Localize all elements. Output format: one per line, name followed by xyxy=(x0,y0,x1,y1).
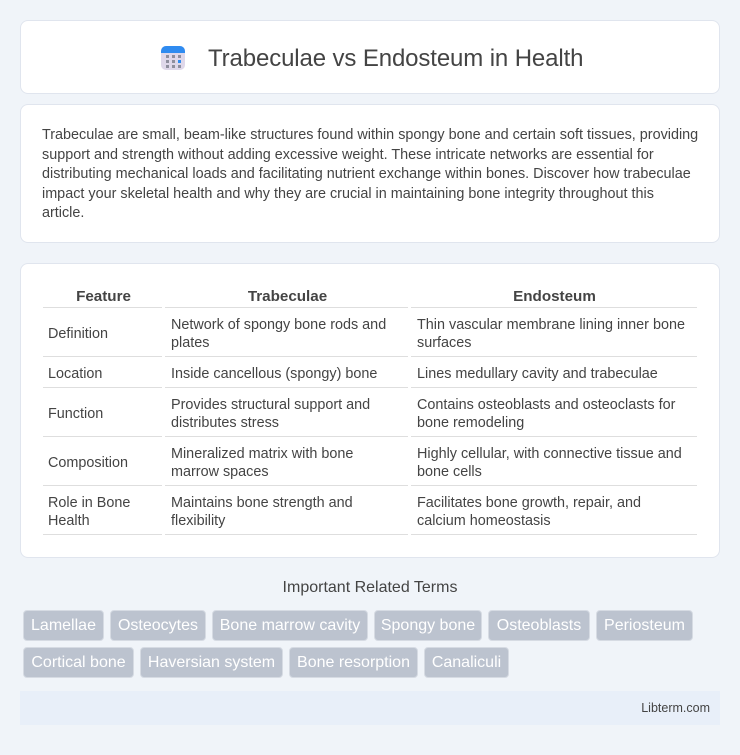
title: Trabeculae vs Endosteum in Health xyxy=(208,45,583,72)
intro text: support and strength without adding excessive weight. These intricate networks are essential for xyxy=(42,146,654,162)
row: function: distributes stress xyxy=(171,415,279,431)
row: role in bone health xyxy=(48,495,641,529)
footer credit: Libterm.com xyxy=(641,701,710,715)
row: definition: Definition xyxy=(48,326,108,342)
related terms tags: Periosteum xyxy=(604,617,685,634)
row: role in bone health: flexibility xyxy=(171,513,225,529)
row: definition: Thin vascular membrane lining inner bone xyxy=(417,317,685,333)
related terms heading: Important Related Terms xyxy=(283,579,457,596)
icon: calendar xyxy=(161,46,185,70)
row: definition: plates xyxy=(171,335,209,351)
row: function: Provides structural support and xyxy=(171,397,370,413)
row: location: Location xyxy=(48,366,102,382)
row: composition: marrow spaces xyxy=(171,464,269,480)
row: function: bone remodeling xyxy=(417,415,524,431)
header card xyxy=(20,20,720,94)
intro text: article. xyxy=(42,205,84,221)
comparison table card xyxy=(20,263,720,558)
row: function xyxy=(48,397,676,431)
row: composition xyxy=(48,446,682,480)
row: definition xyxy=(48,317,685,351)
intro text: distributing mechanical loads and facilitating nutrient exchange within bones. Discover how trabeculae xyxy=(42,166,691,182)
related terms tags xyxy=(23,610,693,678)
intro card xyxy=(20,104,720,243)
related terms tags: Osteocytes xyxy=(118,617,198,634)
related terms tags: Cortical bone xyxy=(31,654,126,671)
row: composition: Composition xyxy=(48,455,128,471)
row: composition: Highly cellular, with connective tissue and xyxy=(417,446,682,462)
row: role in bone health: calcium homeostasis xyxy=(417,513,551,529)
row: role in bone health: Health xyxy=(48,513,90,529)
row: composition: bone cells xyxy=(417,464,482,480)
row: function: Function xyxy=(48,406,103,422)
footer bar xyxy=(20,691,720,725)
row: location: Inside cancellous (spongy) bone xyxy=(171,366,377,382)
table header xyxy=(76,288,596,305)
related terms tags: Haversian system xyxy=(148,654,275,671)
row: role in bone health: Role in Bone xyxy=(48,495,130,511)
intro text: Trabeculae are small, beam-like structures found within spongy bone and certain soft tissues, providing xyxy=(42,127,698,143)
related terms tags: Spongy bone xyxy=(381,617,475,634)
row: role in bone health: Facilitates bone growth, repair, and xyxy=(417,495,641,511)
related terms tags: Osteoblasts xyxy=(497,617,581,634)
row: location xyxy=(48,366,658,382)
related terms tags: Lamellae xyxy=(31,617,96,634)
row: role in bone health: Maintains bone strength and xyxy=(171,495,353,511)
intro text xyxy=(42,127,698,221)
row: function: Contains osteoblasts and osteoclasts for xyxy=(417,397,675,413)
intro text: impact your skeletal health and why they are crucial in maintaining bone integrity throughout this xyxy=(42,186,654,202)
table header: Trabeculae xyxy=(248,288,327,305)
table header: Feature xyxy=(76,288,131,305)
row: composition: Mineralized matrix with bone xyxy=(171,446,353,462)
related terms tags: Canaliculi xyxy=(432,654,501,671)
table header: Endosteum xyxy=(513,288,596,305)
row: location: Lines medullary cavity and trabeculae xyxy=(417,366,658,382)
row: definition: Network of spongy bone rods and xyxy=(171,317,386,333)
related terms tags: Bone marrow cavity xyxy=(220,617,360,634)
related terms tags: Bone resorption xyxy=(297,654,410,671)
row: definition: surfaces xyxy=(417,335,471,351)
